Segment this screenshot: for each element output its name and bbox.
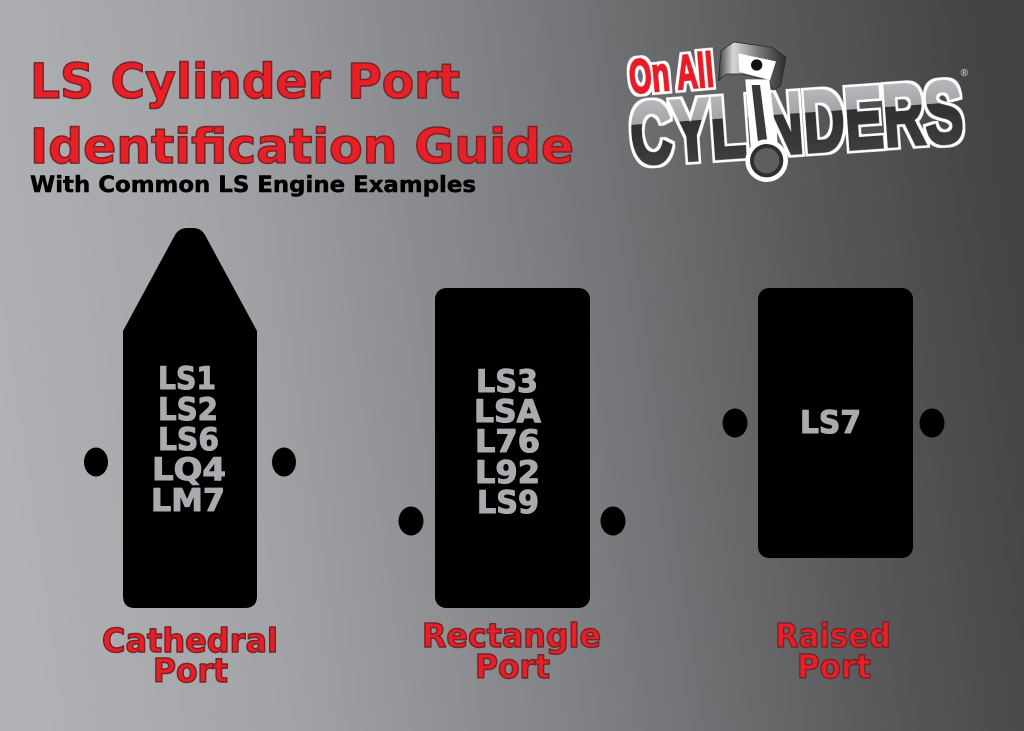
logo registered mark: ®: [961, 68, 969, 79]
rectangle engines list: LS9: [477, 485, 539, 521]
cathedral engines list: LM7: [151, 483, 225, 519]
cathedral port shape: [123, 228, 257, 608]
subtitle: With Common LS Engine Examples: [30, 173, 476, 198]
rod channel: [752, 85, 767, 145]
cathedral engines list: LS6: [158, 422, 219, 458]
rectangle engines list: L76: [475, 424, 540, 460]
raised engine text: LS7: [800, 405, 861, 441]
logo: On All Cylinders: [627, 42, 969, 183]
title line 2: Identification Guide: [30, 119, 574, 175]
rectangle engines list: L92: [475, 455, 540, 491]
cathedral engines list: [151, 361, 226, 519]
logo wordmark On All: On All: [627, 43, 716, 104]
cathedral right bolt hole: [272, 448, 296, 476]
rectangle engines list: LSA: [474, 394, 541, 430]
cathedral engines list: LS2: [158, 392, 218, 428]
raised port shape: [758, 288, 913, 558]
connecting rod: [746, 80, 777, 152]
rectangle label: [422, 616, 601, 686]
rectangle left bolt hole: [398, 506, 424, 536]
panel: rectangle port: [398, 288, 626, 686]
piston skirt highlight: [738, 53, 776, 80]
title block: [30, 54, 574, 198]
title line 1: LS Cylinder Port: [30, 54, 460, 110]
cathedral label: Cathedral: [102, 621, 278, 660]
cathedral label: [102, 621, 278, 690]
rectangle label: Rectangle: [422, 616, 601, 655]
raised left bolt hole: [722, 408, 748, 438]
raised label: [775, 616, 891, 686]
piston head: [718, 42, 786, 90]
cathedral engines list: LS1: [158, 361, 216, 397]
raised right bolt hole: [920, 408, 944, 438]
rectangle label: Port: [475, 647, 550, 686]
big end ring: [745, 139, 788, 182]
cathedral left bolt hole: [84, 448, 108, 476]
piston pin: [751, 59, 762, 71]
raised label: Raised: [775, 616, 891, 655]
rectangle engines list: [474, 364, 541, 521]
panel: cathedral port: [84, 228, 296, 690]
rectangle port shape: [435, 288, 590, 608]
cathedral label: Port: [153, 651, 228, 690]
raised label: Port: [797, 647, 871, 686]
rectangle right bolt hole: [600, 506, 626, 536]
rectangle engines list: LS3: [476, 364, 538, 400]
logo piston: [718, 42, 788, 182]
panel: raised port: [722, 288, 944, 686]
cathedral engines list: LQ4: [152, 452, 226, 488]
